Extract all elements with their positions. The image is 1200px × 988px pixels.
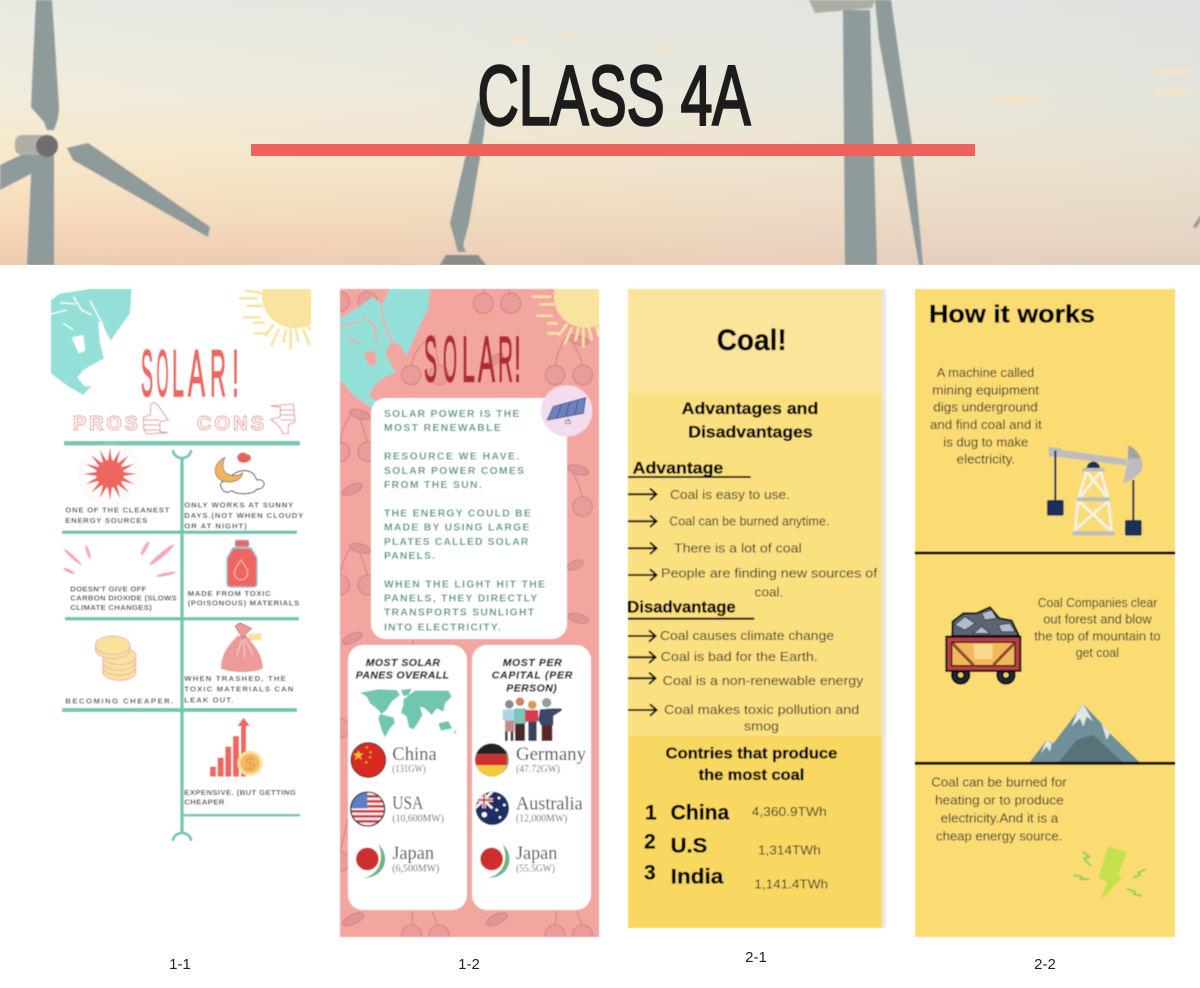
- text: Japan: Japan: [516, 843, 558, 864]
- heading: MOST SOLAR: [366, 657, 440, 669]
- text: one of the cleanest: [65, 506, 170, 525]
- heading: PANES OVERALL: [356, 670, 449, 682]
- text: China: China: [392, 744, 437, 765]
- text: mining equipment: is dug to make: [943, 434, 1028, 449]
- icon: red sun: [81, 445, 139, 503]
- list: disadvantages: Coal causes climate change: [660, 628, 834, 643]
- list: disadvantages: Disadvantage: [627, 597, 736, 616]
- caption 2-2: 2-2: [1034, 956, 1056, 973]
- text: mining equipment: A machine called: [937, 365, 1034, 380]
- card: most per capita: [472, 645, 591, 910]
- text: when trashed: TOXIC MATERIALS CAN: [184, 685, 294, 694]
- text: Australia: (12,000MW): [516, 814, 567, 825]
- cherry background pattern: [330, 289, 593, 945]
- title: CLASS 4A: CLASS 4A: [478, 48, 750, 142]
- heading: countries that produce the most coal: [666, 746, 838, 784]
- icon: thumbs up: [143, 403, 168, 434]
- text: USA: USA: [392, 793, 424, 814]
- icon: toxic bottle: [227, 540, 257, 587]
- text: coal companies: [1034, 595, 1161, 660]
- heading: SOLAR!: S: [141, 336, 153, 410]
- list: disadvantages: Coal makes toxic pollution and: [664, 702, 859, 717]
- heading: SOLAR!: S: [424, 322, 437, 396]
- ranking: top coal producers: U.S: [671, 834, 707, 857]
- card: solar power explanation: PANELS, THEY DIRECTLY: [384, 594, 537, 605]
- icon: thumbs down: [271, 404, 295, 434]
- list: advantages: Coal is easy to use.: [670, 487, 790, 502]
- heading: SOLAR!: R: [210, 336, 226, 410]
- icon: stack of coins: [95, 636, 136, 680]
- text: coal can be burned: Coal can be burned for: [931, 775, 1067, 790]
- card: solar power explanation: THE ENERGY COULD BE: [384, 508, 531, 519]
- icon: pink burst rays: [63, 540, 176, 578]
- icon: rising bar chart with coin: [210, 718, 263, 777]
- text: mining equipment: electricity.: [957, 452, 1015, 467]
- text: mining equipment: and find coal and it: [930, 417, 1042, 432]
- panel: solar pros and cons (1-1): !: [232, 336, 239, 410]
- icon: mountain: [1029, 704, 1140, 763]
- icon: map of North America: [51, 289, 132, 395]
- list: advantages: Coal can be burned anytime.: [669, 514, 829, 529]
- icon: moon and cloud: [215, 453, 264, 494]
- text: Japan: [516, 843, 558, 875]
- panel: how coal works (2-2): [915, 289, 1175, 937]
- icon: coal cart: [946, 607, 1020, 684]
- panel: solar pros and cons (1-1): [50, 288, 312, 842]
- ranking: top coal producers: 1: [645, 801, 657, 824]
- banner: wind turbine photo: [0, 0, 1200, 265]
- text: made from toxic materials: (POISONOUS) MATERIALS: [188, 599, 299, 608]
- ranking: top coal producers: China: [671, 801, 730, 824]
- heading: SOLAR!: [141, 336, 239, 410]
- list: disadvantages: [627, 597, 864, 734]
- icon: lightning bolt: [1073, 847, 1146, 902]
- list: disadvantages: Coal is bad for the Earth.: [661, 649, 818, 664]
- text: coal companies: the top of mountain to: [1034, 628, 1161, 643]
- icon: map of North America: [340, 289, 430, 409]
- text: Japan: (55.5GW): [516, 864, 555, 875]
- heading: Coal!: Coal!: [717, 324, 787, 357]
- text: mining equipment: digs underground: [933, 400, 1038, 415]
- text: coal companies: Coal Companies clear: [1038, 595, 1158, 610]
- card: solar power explanation: RESOURCE WE HAVE.: [384, 452, 519, 463]
- list: advantages: People are finding new sources of: [661, 566, 878, 581]
- heading: PERSON): [506, 683, 557, 695]
- card: solar power explanation: PANELS.: [384, 551, 435, 562]
- text: Japan: [392, 843, 439, 875]
- ranking: top coal producers: 1,314TWh: [758, 842, 821, 857]
- icon: group of people: [503, 697, 562, 741]
- heading: SOLAR!: A: [478, 322, 495, 396]
- text: no carbon dioxide: CLIMATE CHANGES): [70, 603, 152, 612]
- heading: [492, 657, 573, 695]
- text: expensive: [184, 788, 296, 806]
- panel: solar facts (1-2): R: [498, 322, 513, 396]
- heading: SOLAR!: O: [443, 322, 457, 396]
- title underline bar: [251, 144, 975, 156]
- caption 1-1: 1-1: [169, 956, 191, 973]
- text: China: (131GW): [392, 764, 426, 775]
- text: no carbon dioxide: [70, 584, 177, 612]
- card: solar power explanation: FROM THE SUN.: [384, 480, 482, 491]
- text: when trashed: [184, 674, 294, 705]
- text: USA: [392, 793, 444, 825]
- panel: coal advantages (2-1): [627, 289, 886, 928]
- text: Australia: Australia: [516, 794, 583, 815]
- text: coal can be burned: electricity.And it is a: [941, 811, 1059, 826]
- text: coal companies: out forest and blow: [1043, 612, 1152, 627]
- icon: China flag: [351, 743, 386, 777]
- caption 1-2: 1-2: [458, 956, 480, 973]
- text: when trashed: WHEN TRASHED, THE: [184, 674, 286, 683]
- text: coal can be burned: heating or to produce: [935, 793, 1064, 808]
- icon: Germany flag: [475, 743, 512, 777]
- heading: advantages and disadvantages: [682, 400, 818, 441]
- text: one of the cleanest: ONE OF THE CLEANEST: [65, 506, 170, 515]
- text: Germany: (47.72GW): [516, 764, 560, 775]
- panel: solar facts (1-2): [339, 288, 600, 938]
- text: only works at sunny days: OR AT NIGHT): [184, 521, 247, 530]
- heading: [356, 657, 449, 682]
- heading: How it works: How it works: [929, 301, 1095, 329]
- icon: sun: [238, 288, 312, 351]
- list: disadvantages: smog: [744, 719, 779, 734]
- text: no carbon dioxide: DOESN'T GIVE OFF: [70, 584, 147, 593]
- card: solar power explanation: MOST RENEWABLE: [384, 423, 501, 434]
- text: coal can be burned: cheap energy source.: [936, 828, 1062, 843]
- icon: trash bag: [221, 623, 263, 672]
- card: solar power explanation: MADE BY USING LARGE: [384, 523, 529, 534]
- heading: CAPITAL (PER: [492, 670, 573, 682]
- ranking: top coal producers: India: [671, 865, 724, 888]
- icon: rising bar chart with coin: $: [245, 754, 255, 774]
- text: China: [392, 744, 437, 775]
- heading: PROS: PROS: [73, 413, 138, 435]
- text: when trashed: LEAK OUT.: [184, 696, 233, 705]
- ranking: top coal producers: 3: [644, 861, 656, 884]
- ranking: top coal producers: 2: [644, 830, 656, 853]
- card: solar power explanation: [371, 398, 567, 639]
- text: mining equipment: [930, 365, 1042, 467]
- card: solar power explanation: WHEN THE LIGHT HIT THE: [384, 579, 545, 590]
- text: Germany: [516, 744, 586, 775]
- heading: countries that produce the most coal: the most coal: [699, 767, 804, 784]
- icon: Japan flag: [356, 844, 385, 878]
- text: becoming cheaper: BECOMING CHEAPER.: [65, 696, 173, 705]
- text: expensive: CHEAPER: [184, 797, 225, 806]
- icon: USA flag: [350, 792, 387, 827]
- list: advantages: coal.: [755, 585, 783, 600]
- icon: oil pump: [1047, 445, 1143, 536]
- heading: SOLAR!: [424, 322, 521, 396]
- ranking: top coal producers: 4,360.9TWh: [752, 804, 827, 819]
- text: coal can be burned: [931, 775, 1067, 843]
- text: made from toxic materials: [188, 589, 299, 608]
- text: no carbon dioxide: CARBON DIOXIDE (SLOWS: [70, 594, 177, 603]
- heading: SOLAR!: L: [172, 336, 184, 410]
- text: expensive: EXPENSIVE. (BUT GETTING: [184, 788, 296, 797]
- text: Australia: [516, 794, 583, 825]
- ranking: top coal producers: [644, 801, 828, 891]
- heading: countries that produce the most coal: Contries that produce: [666, 746, 838, 763]
- card: solar power explanation: PLATES CALLED SOLAR: [384, 537, 529, 548]
- heading: advantages and disadvantages: Advantages and: [682, 400, 818, 418]
- heading: CONS: CONS: [197, 413, 264, 435]
- text: one of the cleanest: ENERGY SOURCES: [65, 516, 147, 525]
- text: only works at sunny days: DAYS.(NOT WHEN CLOUDY: [184, 511, 303, 520]
- card: solar power explanation: INTO ELECTRICITY.: [384, 622, 501, 633]
- icon: Australia flag: [475, 792, 512, 827]
- text: only works at sunny days: ONLY WORKS AT SUNNY: [184, 501, 293, 510]
- text: mining equipment: mining equipment: [932, 382, 1039, 397]
- list: advantages: [628, 458, 878, 600]
- panel: solar facts (1-2): !: [514, 322, 521, 396]
- icon: world map: [360, 689, 457, 737]
- text: Japan: (6,500MW): [392, 864, 439, 875]
- heading: SOLAR!: A: [188, 336, 205, 410]
- caption 2-1: 2-1: [745, 949, 767, 966]
- text: USA: (10,600MW): [392, 814, 444, 825]
- text: coal companies: get coal: [1076, 645, 1119, 660]
- text: made from toxic materials: MADE FROM TOXIC: [188, 589, 271, 598]
- list: disadvantages: Coal is a non-renewable energy: [663, 673, 864, 688]
- list: advantages: Advantage: [633, 458, 723, 477]
- icon: solar panel badge: [541, 385, 592, 437]
- text: only works at sunny days: [184, 501, 303, 530]
- heading: MOST PER: [503, 657, 562, 669]
- text: Japan: Japan: [392, 843, 434, 864]
- heading: advantages and disadvantages: Disadvantages: [688, 423, 813, 441]
- heading: SOLAR!: O: [156, 336, 168, 410]
- icon: sun: [532, 288, 600, 348]
- icon: Japan flag: [480, 844, 510, 878]
- ranking: top coal producers: 1,141.4TWh: [754, 876, 828, 891]
- list: advantages: There is a lot of coal: [674, 540, 802, 555]
- heading: SOLAR!: L: [462, 322, 475, 396]
- divider line: [915, 552, 1175, 554]
- card: most solar panes overall: [348, 645, 467, 910]
- card: solar power explanation: TRANSPORTS SUNLIGHT: [384, 608, 535, 619]
- card: solar power explanation: SOLAR POWER IS THE: [384, 409, 519, 420]
- timeline: teal grid lines: [62, 441, 300, 841]
- text: Germany: Germany: [516, 744, 586, 765]
- card: solar power explanation: SOLAR POWER COMES: [384, 466, 524, 477]
- divider line: [915, 762, 1175, 765]
